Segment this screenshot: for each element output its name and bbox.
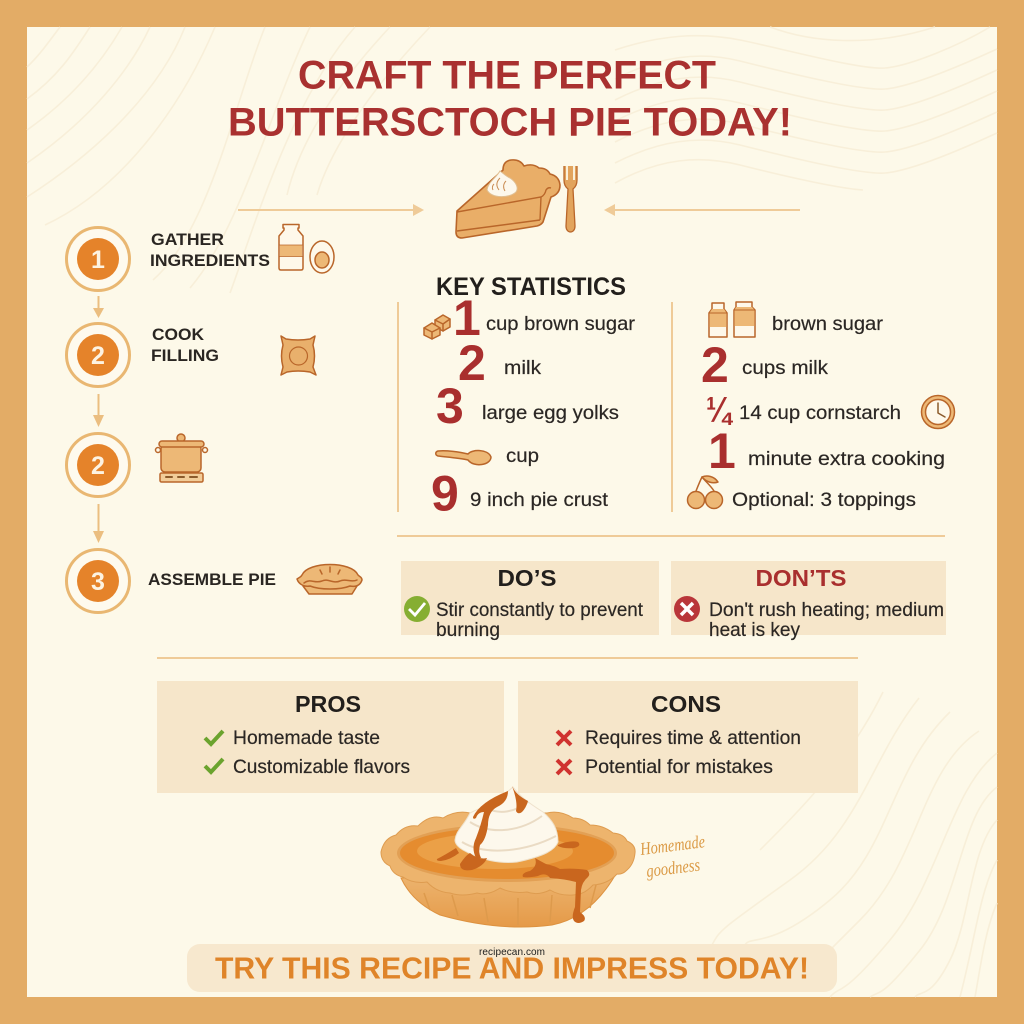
step 2 cook filling xyxy=(66,324,219,386)
left statistics column: 9 inch pie crust xyxy=(470,489,609,511)
arrow: step 2 to second 2 xyxy=(93,394,104,427)
icon: cross xyxy=(557,731,571,745)
step 2 pot xyxy=(66,434,130,496)
step 1: GATHER xyxy=(151,230,224,249)
icon: check xyxy=(205,731,223,744)
panel: pros xyxy=(157,681,504,793)
handwritten note: goodness xyxy=(645,855,701,881)
left statistics column: milk xyxy=(504,357,541,379)
step 2 cook filling: FILLING xyxy=(151,346,219,365)
step 3 xyxy=(66,550,276,612)
step 1: INGREDIENTS xyxy=(150,251,270,270)
illustration: butterscotch pie with whipped cream xyxy=(381,786,635,927)
call to action banner xyxy=(187,944,837,992)
left statistics column: cup xyxy=(506,445,539,467)
icon: sugar cubes xyxy=(424,315,450,339)
icon: pie slice with fork xyxy=(456,160,577,238)
title: CRAFT THE PERFECT xyxy=(298,54,716,98)
panel: don'ts: DON’TS xyxy=(756,565,846,591)
icon: red cross xyxy=(674,596,700,622)
handwritten note xyxy=(638,831,706,881)
arrow: right to pie slice xyxy=(604,204,800,216)
panel: do's: Stir constantly to prevent xyxy=(436,599,644,621)
icon: flour bag xyxy=(281,336,316,375)
panel: pros: Homemade taste xyxy=(233,727,380,749)
right statistics column: Optional: 3 toppings xyxy=(732,489,916,511)
panel: cons: Requires time & attention xyxy=(585,727,801,749)
step 1: 1 xyxy=(91,246,105,274)
icon: clock xyxy=(922,396,954,428)
left statistics column: 1 xyxy=(453,290,481,346)
title: BUTTERSCTOCH PIE TODAY! xyxy=(228,100,792,144)
right statistics column: 1 xyxy=(708,423,736,479)
step 3: 3 xyxy=(91,568,105,596)
icon: milk cartons xyxy=(709,302,755,337)
left statistics column xyxy=(397,290,636,522)
panel: pros: PROS xyxy=(295,691,361,717)
panel: don'ts: heat is key xyxy=(709,619,800,641)
left statistics column: large egg yolks xyxy=(482,402,619,424)
step 2 cook filling: COOK xyxy=(152,325,205,344)
panel: cons: CONS xyxy=(651,691,721,717)
icon: green check xyxy=(404,596,430,622)
step 3: ASSEMBLE PIE xyxy=(148,570,276,589)
icon: check xyxy=(205,759,223,772)
source url: recipecan.com xyxy=(479,947,545,958)
panel: cons xyxy=(518,681,858,793)
icon: whole pie xyxy=(297,564,362,594)
arrow: second 2 to 3 xyxy=(93,504,104,543)
step 1 xyxy=(66,228,270,290)
right statistics column: 2 xyxy=(701,337,729,393)
panel: don'ts xyxy=(671,561,946,641)
right statistics column: brown sugar xyxy=(772,313,884,335)
panel: do's: burning xyxy=(436,619,500,641)
right statistics column: cups milk xyxy=(742,357,828,379)
right statistics column: ¼ xyxy=(706,389,733,430)
left statistics column: 9 xyxy=(431,466,459,522)
step 2 pot: 2 xyxy=(91,452,105,480)
panel: pros: Customizable flavors xyxy=(233,756,410,778)
panel: do's xyxy=(401,561,659,641)
handwritten note: Homemade xyxy=(638,831,706,859)
right statistics column: 14 cup cornstarch xyxy=(739,402,901,424)
icon: milk bottle and egg xyxy=(279,224,334,273)
left statistics column: cup brown sugar xyxy=(486,313,636,335)
call to action banner: TRY THIS RECIPE AND IMPRESS TODAY! xyxy=(215,952,809,986)
right statistics column xyxy=(671,302,954,512)
left statistics column: 3 xyxy=(436,378,464,434)
step 2 cook filling: 2 xyxy=(91,342,105,370)
icon: cherries xyxy=(688,476,722,508)
heading: key statistics: KEY STATISTICS xyxy=(436,273,626,301)
arrow: step 1 to 2 xyxy=(93,296,104,318)
title xyxy=(228,54,792,144)
panel: don'ts: Don't rush heating; medium xyxy=(709,599,944,621)
panel: cons: Potential for mistakes xyxy=(585,756,773,778)
left statistics column: 2 xyxy=(458,335,486,391)
panel: do's: DO’S xyxy=(498,565,556,591)
right statistics column: minute extra cooking xyxy=(748,448,945,470)
icon: pot on hob xyxy=(156,434,208,482)
icon: cross xyxy=(557,760,571,774)
arrow: left to pie slice xyxy=(238,204,424,216)
icon: spoon xyxy=(436,451,491,465)
